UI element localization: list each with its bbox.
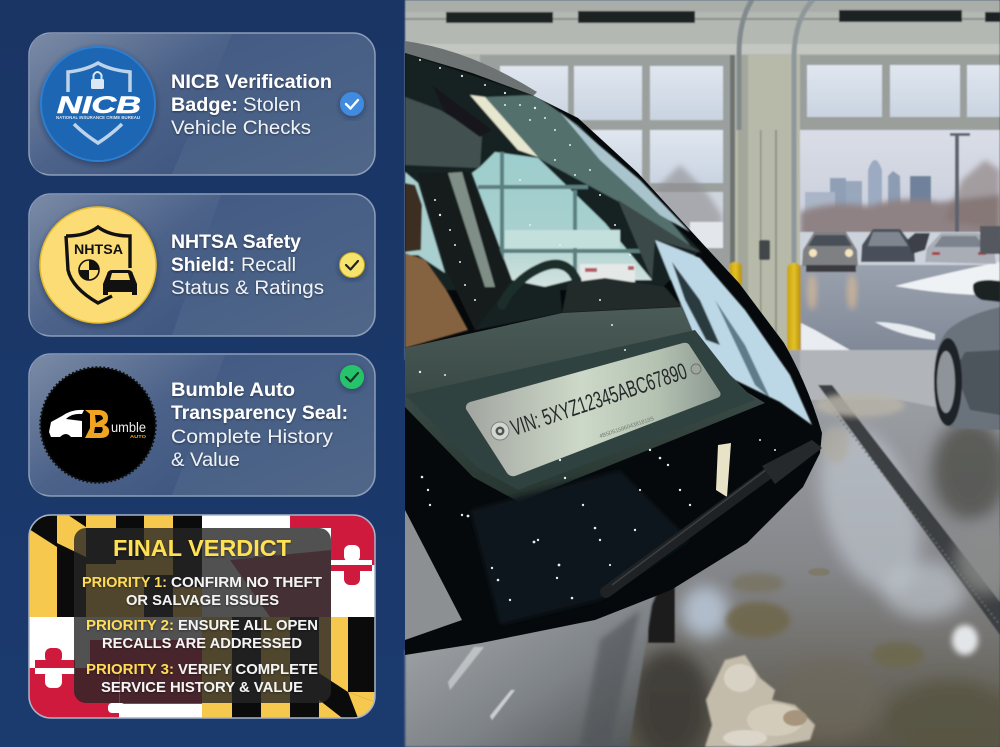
priorities list: PRIORITY 3:	[86, 661, 174, 678]
VIN plate	[466, 343, 721, 476]
lower tyre	[648, 585, 675, 643]
VIN text: VIN: 5XYZ12345ABC67890	[507, 358, 690, 441]
wet floor	[620, 350, 1000, 747]
icon: green check	[340, 365, 364, 389]
wet parking lot and snow	[800, 262, 1000, 355]
icon: Bumble Auto seal: umble	[111, 420, 146, 435]
heading: final verdict: FINAL VERDICT	[113, 535, 291, 561]
icon: Bumble Auto seal: AUTO	[130, 434, 147, 439]
priorities list: PRIORITY 2:	[86, 617, 174, 634]
text: Bumble Auto label: & Value	[171, 449, 240, 471]
priorities list: CONFIRM NO THEFT	[171, 574, 322, 591]
verdict overlay panel	[74, 528, 331, 703]
icon: NHTSA shield badge: NHTSA	[74, 241, 123, 257]
car hood	[405, 585, 660, 747]
text: NHTSA label: Recall	[241, 254, 296, 276]
card: Maryland flag final verdict	[29, 515, 375, 718]
priorities list: PRIORITY 1:	[82, 574, 167, 591]
plate fine print: 4B5D5158604381818S	[599, 416, 655, 440]
text: NHTSA label: Status & Ratings	[171, 277, 324, 299]
text: NICB label: Vehicle Checks	[171, 117, 311, 139]
text: Bumble Auto label: Bumble Auto	[171, 379, 295, 401]
cross upper right	[331, 545, 372, 585]
left navy panel	[0, 0, 405, 747]
silver car on right	[934, 280, 1000, 430]
outdoor view with skyline	[800, 130, 1000, 268]
text: NICB label	[171, 71, 332, 139]
interior view through glass	[405, 53, 812, 425]
wiper	[606, 440, 822, 592]
text: Bumble Auto label	[171, 379, 348, 471]
card: NICB	[29, 33, 375, 175]
priorities list	[82, 574, 322, 696]
central pillar and door tracks	[730, 0, 813, 365]
icon: yellow check	[340, 252, 364, 278]
priorities list: VERIFY COMPLETE	[178, 661, 318, 678]
priorities list: SERVICE HISTORY & VALUE	[101, 679, 303, 696]
text: NICB label: Badge:	[171, 94, 238, 116]
text: NICB label: NICB Verification	[171, 71, 332, 93]
Maryland flag background	[29, 515, 375, 718]
windshield	[405, 41, 822, 655]
icon: NICB shield badge	[41, 47, 155, 161]
icon: NHTSA shield badge	[40, 207, 156, 323]
card: Bumble Auto	[29, 354, 375, 496]
dirty snow clump	[705, 655, 815, 747]
plate right screw	[691, 364, 701, 374]
silver A-pillar wedge	[405, 510, 462, 640]
text: NHTSA label: NHTSA Safety	[171, 231, 301, 253]
dark lower glass reflections	[470, 470, 690, 625]
icon: NICB shield badge: NICB	[57, 92, 141, 119]
priorities list: OR SALVAGE ISSUES	[126, 592, 279, 609]
text: Bumble Auto label: Complete History	[171, 426, 333, 448]
garage background	[405, 0, 1000, 747]
text: Bumble Auto label: Transparency Seal:	[171, 402, 348, 424]
text: NHTSA label: Shield:	[171, 254, 235, 276]
icon: blue check	[340, 92, 364, 116]
right door upper windows	[798, 55, 1000, 131]
cross lower left	[35, 648, 75, 688]
text: NICB label: Stolen	[243, 94, 301, 116]
text: NHTSA label	[171, 231, 324, 299]
icon: Bumble Auto seal	[40, 368, 156, 482]
plate mounting screw	[491, 422, 509, 440]
card: NHTSA	[29, 194, 375, 336]
dashboard	[405, 307, 765, 502]
icon: NICB shield badge: NATIONAL INSURANCE CRIME BUREAU	[56, 115, 140, 120]
yellow bollards	[729, 262, 801, 361]
priorities list: ENSURE ALL OPEN	[178, 617, 318, 634]
parked cars	[802, 226, 1000, 272]
water droplets	[419, 59, 776, 601]
priorities list: RECALLS ARE ADDRESSED	[102, 635, 302, 652]
